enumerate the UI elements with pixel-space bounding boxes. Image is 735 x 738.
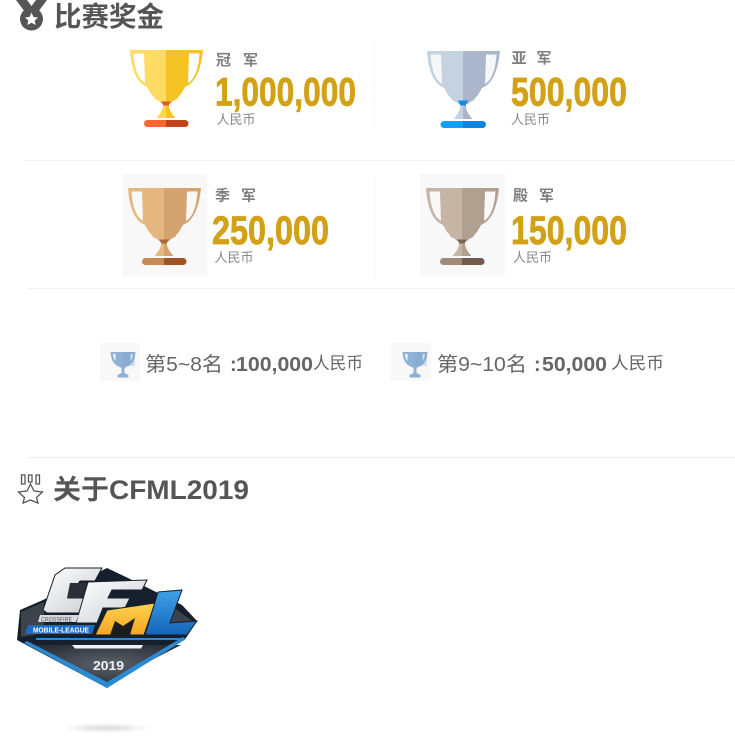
icon backdrop	[100, 343, 140, 381]
heading: 比赛奖金: 比赛奖金	[54, 1, 164, 32]
section: prize money heading	[16, 0, 164, 32]
panel: runner-up	[427, 50, 627, 128]
panel: fourth place	[420, 174, 627, 276]
icon: silver trophy	[427, 51, 500, 128]
amount: 500,000: 500,000	[511, 70, 627, 114]
icon: blue trophy	[110, 352, 136, 378]
unit: 人民币: 人民币	[611, 354, 664, 373]
trophy backdrop	[122, 174, 207, 276]
label: 季军: 季	[215, 188, 230, 204]
M cutout	[110, 618, 135, 635]
panel: 9th to 10th prize	[391, 343, 664, 381]
label: 亚军: 军	[536, 50, 552, 67]
amount: 100,000: 100,000	[236, 353, 313, 376]
logo: CFML 2019 badge	[17, 568, 197, 688]
panel: champion	[130, 50, 356, 127]
unit: 人民币: 人民币	[216, 112, 256, 127]
banner: MOBILE-LEAGUE	[25, 625, 95, 634]
letter C	[43, 568, 102, 613]
banner: MOBILE-LEAGUE: MOBILE-LEAGUE	[33, 628, 89, 634]
letter L	[145, 590, 197, 635]
unit: 人民币: 人民币	[513, 250, 552, 265]
letter M	[95, 603, 155, 635]
year: 2019: 2019	[93, 658, 124, 673]
logo shadow	[62, 723, 152, 733]
text: 第5~8名: 第5~8名	[145, 353, 223, 376]
amount: 150,000: 150,000	[511, 209, 627, 253]
icon: gold trophy	[130, 50, 203, 127]
heading: 关于CFML2019: 关于CFML2019	[53, 475, 249, 505]
icon: blue trophy	[402, 352, 428, 378]
label: 冠军: 冠	[216, 52, 231, 69]
panel: third place	[122, 174, 329, 276]
text: colon: :	[230, 354, 237, 376]
icon: bronze trophy	[128, 188, 201, 265]
label: 殿军: 军	[539, 188, 554, 204]
text: colon: :	[534, 354, 541, 376]
amount: 1,000,000: 1,000,000	[215, 70, 356, 114]
icon backdrop	[391, 343, 431, 381]
label: 殿军: 殿	[513, 188, 528, 204]
icon: star with ribbons	[18, 475, 42, 503]
icon: medal	[16, 0, 47, 30]
amount: 50,000: 50,000	[542, 353, 607, 376]
amount: 250,000: 250,000	[212, 209, 329, 253]
icon: taupe trophy	[426, 188, 499, 265]
badge shield	[17, 568, 197, 688]
unit: 人民币: 人民币	[214, 250, 254, 265]
trophy backdrop	[420, 174, 505, 276]
text: 第9~10名: 第9~10名	[437, 353, 527, 376]
panel: 5th to 8th prize	[100, 343, 363, 381]
unit: 人民币: 人民币	[313, 354, 363, 373]
banner: CROSSFIRE: CROSSFIRE	[41, 616, 73, 624]
section: about heading	[18, 475, 249, 505]
label: 亚军: 亚	[512, 50, 527, 67]
label: 冠军: 军	[243, 52, 258, 69]
unit: 人民币: 人民币	[511, 112, 550, 127]
C counter	[67, 583, 90, 598]
letter F	[76, 580, 147, 623]
label: 季军: 军	[241, 188, 256, 204]
